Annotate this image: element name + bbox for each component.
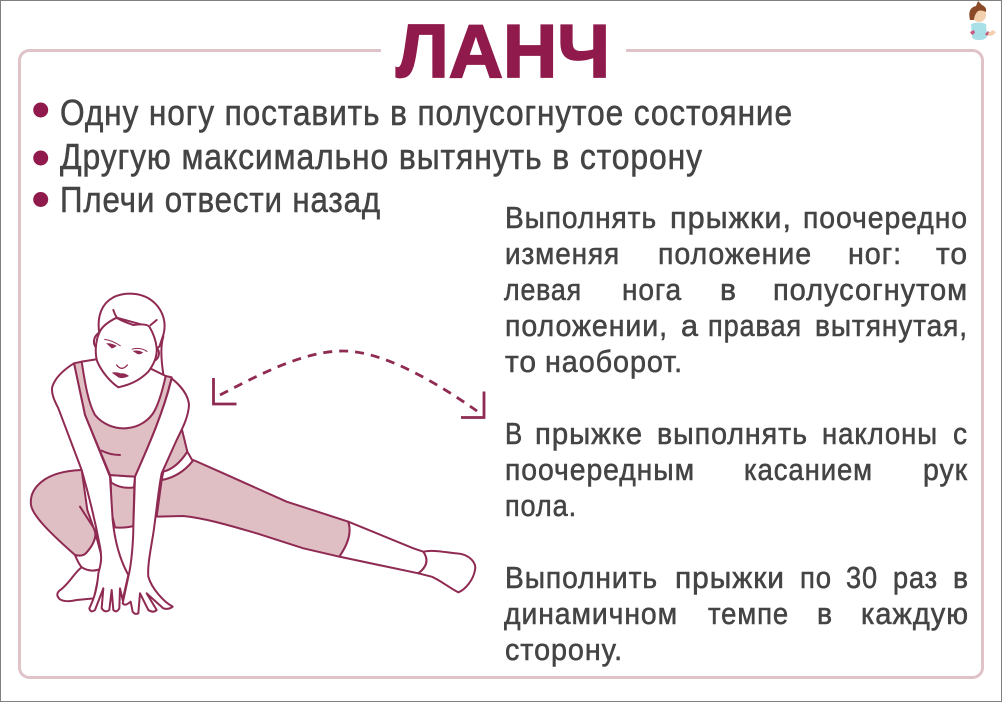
bullet 2: Другую максимально вытянуть в сторону	[60, 136, 703, 177]
text block: repetitions: 30	[846, 560, 878, 595]
fringe locks	[113, 310, 157, 325]
hair	[99, 294, 165, 348]
text block: repetitions	[504, 560, 969, 667]
bent thigh	[31, 470, 95, 556]
text block: repetitions: динамичном	[504, 596, 678, 631]
left eye	[104, 339, 121, 346]
text block: jumping instructions: вытянутая,	[815, 308, 968, 343]
text block: jumping instructions: положение	[658, 236, 812, 271]
text block: repetitions: в	[953, 560, 969, 595]
shoulders and neck	[82, 359, 166, 376]
text block: touching the floor: с	[953, 416, 968, 451]
text block: jumping instructions: правая	[708, 308, 802, 343]
lips	[112, 372, 129, 378]
right eye	[132, 348, 147, 352]
text block: jumping instructions: поочередно	[803, 200, 968, 235]
text block: repetitions: по	[800, 560, 832, 595]
text block: repetitions: Выполнить	[505, 560, 658, 595]
text block: jumping instructions: левая	[504, 272, 582, 307]
abdomen fold	[102, 451, 120, 455]
text block: jumping instructions: в	[720, 272, 737, 307]
extended foot	[418, 551, 475, 592]
text block: jumping instructions	[504, 200, 968, 379]
text block: jumping instructions: нога	[622, 272, 682, 307]
nose	[117, 365, 127, 368]
knee crease	[80, 507, 95, 530]
face	[96, 318, 157, 387]
extended shin	[339, 522, 427, 573]
bent foot	[57, 567, 100, 601]
text block: touching the floor: наклоны	[822, 416, 938, 451]
bullet 3: Плечи отвести назад	[60, 179, 381, 220]
text block: repetitions: прыжки	[675, 560, 785, 595]
text block: jumping instructions: наоборот.	[545, 344, 683, 379]
text block: touching the floor: касанием	[744, 452, 873, 487]
text block: touching the floor	[505, 416, 968, 523]
bent shin	[75, 532, 102, 571]
text block: repetitions: раз	[893, 560, 938, 595]
text block: jumping instructions: то	[505, 344, 537, 379]
text block: touching the floor: поочередным	[505, 452, 695, 487]
tank top side panel	[160, 428, 187, 472]
text block: touching the floor: прыжке	[535, 416, 643, 451]
text block: touching the floor: рук	[923, 452, 968, 487]
left arm and hand	[52, 363, 128, 611]
right arm and hand	[123, 378, 189, 614]
text block: repetitions: каждую	[861, 596, 969, 631]
illustration: woman in side lunge	[31, 294, 475, 614]
waist band right	[162, 452, 193, 480]
text block: jumping instructions: то	[936, 236, 968, 271]
ear left	[94, 333, 99, 348]
text block: touching the floor: В	[505, 416, 523, 451]
text block: jumping instructions: изменяя	[505, 236, 620, 271]
text block: repetitions: в	[817, 596, 833, 631]
text block: jumping instructions: полусогнутом	[773, 272, 968, 307]
icon: mascot girl	[969, 1, 996, 40]
title: ЛАНЧ	[396, 9, 610, 93]
text block: repetitions: сторону.	[505, 632, 623, 667]
text block: touching the floor: пола.	[505, 488, 577, 523]
tank top	[74, 362, 172, 477]
text block: touching the floor: выполнять	[657, 416, 808, 451]
text block: jumping instructions: прыжки,	[670, 200, 792, 235]
hips	[111, 482, 134, 528]
extended thigh	[157, 460, 350, 557]
text block: jumping instructions: ног:	[848, 236, 902, 271]
text block: jumping instructions: положении,	[505, 308, 668, 343]
arrow: dashed double-headed curve	[214, 351, 484, 418]
waist band centre	[110, 475, 135, 488]
text block: repetitions: темпе	[708, 596, 789, 631]
bullet 1: Одну ногу поставить в полусогнутое состояние	[60, 92, 793, 133]
ear right	[154, 348, 159, 361]
bullet list	[33, 92, 793, 220]
text block: jumping instructions: а	[681, 308, 699, 343]
text block: jumping instructions: Выполнять	[505, 200, 657, 235]
ponytail	[161, 337, 163, 374]
